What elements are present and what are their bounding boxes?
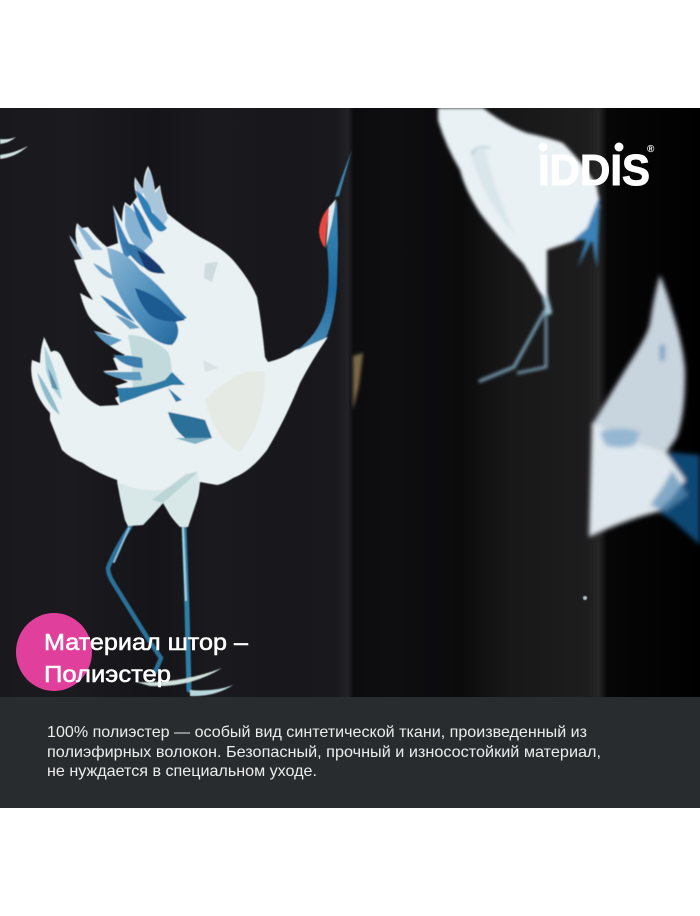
crane legs [108,527,233,696]
second crane legs [480,265,549,381]
infographic canvas [0,108,700,808]
third crane wing [592,275,685,453]
logo: IDDIS: ® [647,144,655,155]
third crane dark blue tail [655,452,700,545]
brown fragment on fold [353,353,363,410]
title: Полиэстер [44,661,171,687]
logo: IDDIS: IDDIS [538,146,650,195]
icon: feather fragment top-left [0,137,28,159]
small speck [583,596,587,600]
wing blue feathers [70,168,218,444]
crane belly shading [117,470,200,527]
illustration: blurred crane top right [438,108,600,381]
decorative pink circle behind title [16,613,92,691]
illustration: main crane [31,150,352,696]
description text: полиэфирных волокон. Безопасный, прочный и износостойкий материал, [47,744,601,761]
crane beak [335,150,352,197]
description text: не нуждается в специальном уходе. [47,763,317,780]
description text: 100% полиэстер — особый вид синтетической ткани, произведенный из [47,724,587,741]
photo panel: curtain with cranes [0,108,700,697]
title [44,629,249,687]
description panel [0,697,700,808]
illustration: blurred crane right edge [589,275,700,545]
crane body and wing [31,166,328,527]
title: Материал штор – [44,629,249,655]
crane red crest [319,206,330,248]
second crane body [438,108,600,298]
crane neck [296,200,338,351]
tail feathers [37,345,62,415]
description text [47,724,601,780]
